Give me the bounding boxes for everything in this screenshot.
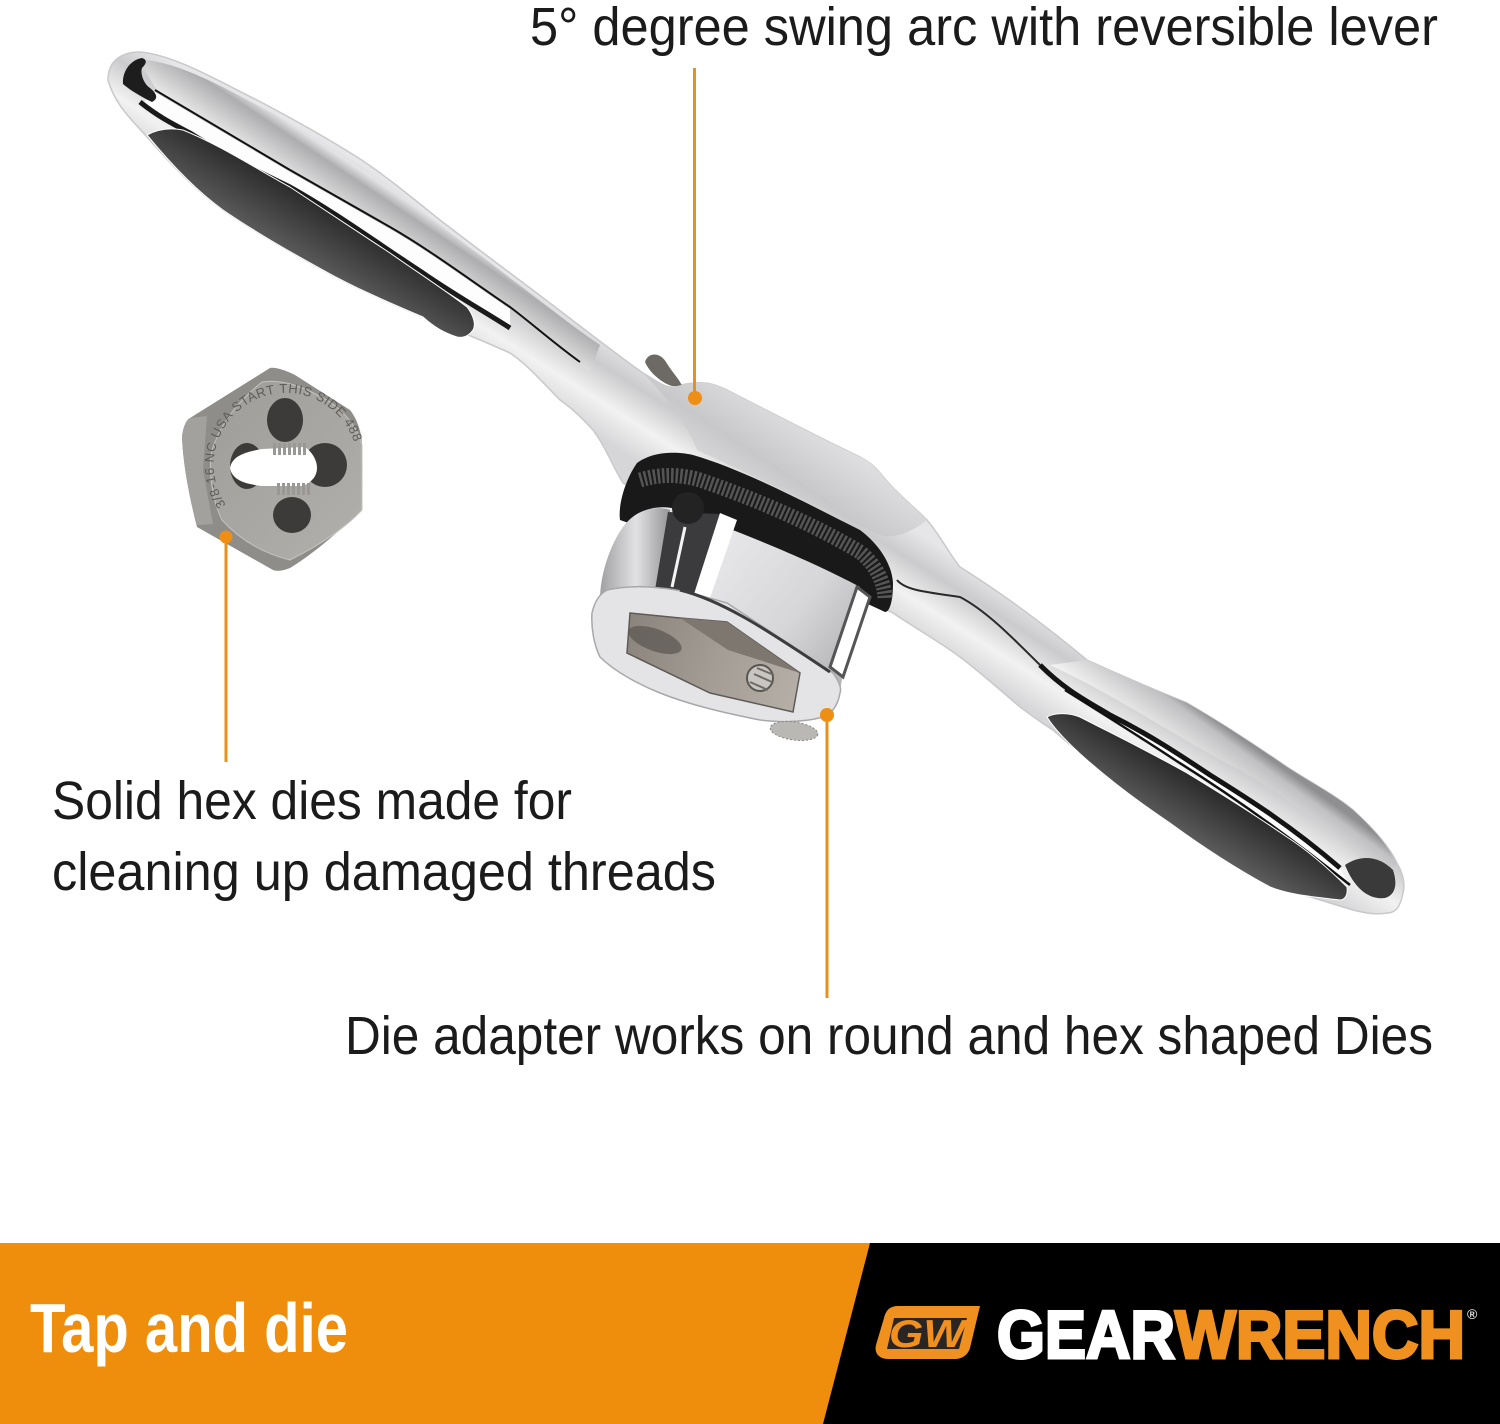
lower handle chrome panel bbox=[1050, 660, 1397, 875]
black rubber ring bbox=[620, 453, 893, 612]
text: die adapter: Die adapter works on round and hex shaped Dies bbox=[345, 1006, 1433, 1066]
hex opening bbox=[627, 613, 800, 712]
footer title: Tap and die bbox=[30, 1289, 348, 1367]
lower shank highlight bbox=[897, 580, 1040, 665]
socket cylinder left side bbox=[600, 508, 670, 600]
text: solid hex dies: Solid hex dies made for bbox=[52, 771, 572, 831]
inner hex facet bbox=[680, 618, 800, 673]
hex die bbox=[182, 368, 362, 571]
die left facet bbox=[182, 416, 213, 525]
text: solid hex dies: cleaning up damaged threads bbox=[52, 842, 716, 902]
die thread bore bbox=[230, 447, 317, 486]
die thread teeth bbox=[273, 449, 310, 489]
wrench body bbox=[108, 52, 1404, 914]
upper handle tip recess bbox=[123, 58, 156, 102]
callout: hex die leader bbox=[220, 530, 232, 762]
knurled thumb screw bbox=[769, 719, 819, 743]
logo monogram: GW bbox=[889, 1313, 969, 1356]
lower handle white band bbox=[1040, 665, 1350, 885]
die outer body bbox=[182, 368, 362, 571]
lower handle tip recess bbox=[1345, 858, 1395, 898]
lower handle reflection lines bbox=[1040, 665, 1340, 868]
wordmark WRENCH: WRENCH bbox=[1175, 1297, 1465, 1373]
knurled ring bbox=[640, 476, 885, 600]
text: solid hex dies bbox=[52, 771, 716, 902]
upper handle chrome panel bbox=[140, 60, 600, 372]
brand logo bbox=[876, 1297, 1478, 1373]
upper handle rubber grip bbox=[147, 129, 474, 337]
socket window highlight bbox=[694, 513, 737, 598]
upper handle reflection lines bbox=[155, 90, 580, 362]
die engraved text: 3/8-16 NC USA START THIS SIDE 488 bbox=[204, 384, 362, 508]
die flute top bbox=[267, 398, 303, 442]
die flute right bbox=[303, 443, 347, 487]
wrench: tap and die ratchet handle bbox=[108, 52, 1404, 914]
reversible lever bbox=[645, 354, 682, 386]
die chamfered face bbox=[210, 381, 362, 560]
lower handle rubber grip bbox=[1047, 714, 1347, 900]
socket face bbox=[592, 587, 841, 722]
socket cylinder bbox=[603, 507, 860, 690]
logo badge bbox=[876, 1306, 980, 1359]
white band beneath panel bbox=[142, 92, 510, 328]
socket right strip bbox=[830, 587, 870, 677]
socket window stripe bbox=[672, 527, 685, 587]
set screw bbox=[747, 665, 774, 691]
wordmark GEAR: GEAR bbox=[997, 1297, 1175, 1373]
registered mark: ® bbox=[1467, 1306, 1478, 1322]
logo badge inner bbox=[887, 1318, 967, 1349]
hex opening dark patch bbox=[625, 620, 685, 660]
footer orange panel bbox=[0, 1243, 880, 1424]
head shading bbox=[643, 373, 927, 536]
die flute left bbox=[230, 443, 264, 489]
footer black panel bbox=[823, 1243, 1500, 1424]
callout: swing arc leader bbox=[688, 68, 702, 405]
die flute bottom bbox=[273, 497, 311, 533]
socket window bbox=[655, 512, 720, 596]
callout: die adapter leader bbox=[820, 708, 834, 998]
black retaining button bbox=[672, 492, 704, 524]
footer band bbox=[0, 1243, 1500, 1424]
rim dark line bbox=[680, 590, 830, 672]
